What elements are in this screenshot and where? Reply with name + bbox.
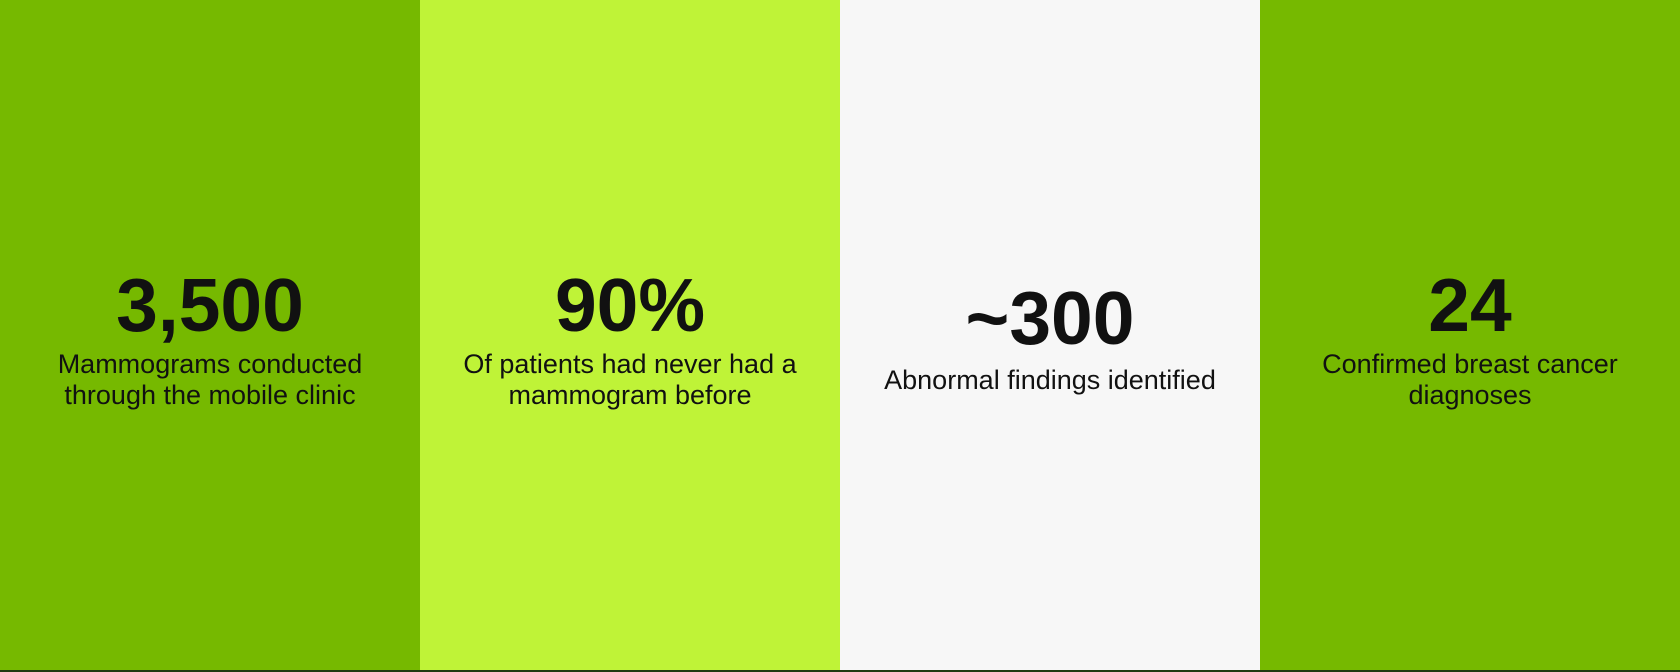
number: 3,500: 3,500 <box>116 263 304 347</box>
label: never before: mammogram before <box>508 380 752 410</box>
panel: diagnoses <box>1260 0 1680 670</box>
label: mammograms <box>58 349 362 410</box>
label: diagnoses: diagnoses <box>1408 380 1532 410</box>
label: never before <box>463 349 797 410</box>
label: diagnoses <box>1322 349 1618 410</box>
label: never before: Of patients had never had a <box>463 349 797 379</box>
label: diagnoses: Confirmed breast cancer <box>1322 349 1618 379</box>
panel: mammograms <box>0 0 420 670</box>
panel: never before <box>420 0 840 670</box>
label: mammograms: Mammograms conducted <box>58 349 362 379</box>
label: mammograms: through the mobile clinic <box>64 380 356 410</box>
number: ~300: ~300 <box>966 276 1134 360</box>
panel: abnormal findings <box>840 0 1260 670</box>
number: 24: 24 <box>1428 263 1512 347</box>
label: abnormal findings: Abnormal findings identified <box>884 365 1216 395</box>
number: 90%: 90% <box>555 263 705 347</box>
